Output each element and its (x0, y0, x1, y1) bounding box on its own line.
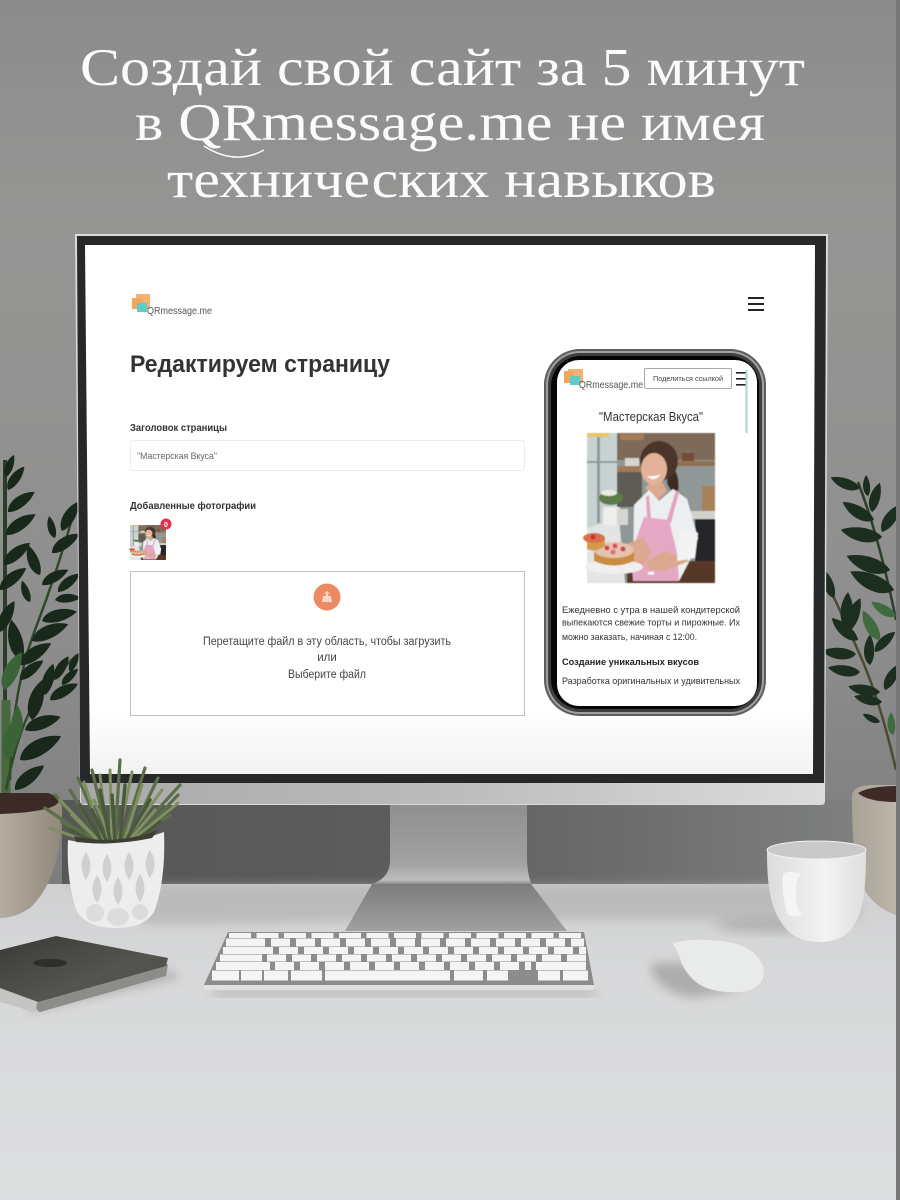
phone paragraph: можно заказать, начиная с 12:00. (562, 632, 697, 643)
white faceted pot (68, 830, 164, 928)
icon: phone hamburger menu (736, 372, 746, 386)
dropzone text: Перетащите файл в эту область, чтобы загрузить (203, 636, 451, 648)
dropzone text: Выберите файл (288, 669, 366, 681)
phone paragraph (562, 605, 740, 643)
notebook (0, 936, 180, 1012)
key rows (212, 936, 588, 976)
logo: QRmessage.me (132, 294, 212, 317)
dropzone panel (130, 572, 524, 716)
dropzone text: или (317, 652, 337, 664)
monitor black bezel (77, 236, 826, 783)
icon: hamburger menu (748, 297, 764, 311)
title: технических навыков (167, 151, 716, 209)
input: page title: "Мастерская Вкуса" (137, 451, 217, 461)
desk surface (0, 884, 900, 1200)
stand neck (372, 804, 532, 884)
heading: edit page: Редактируем страницу (130, 351, 391, 378)
logo: QRmessage.me: QRmessage.me (147, 305, 212, 317)
label: page title: Заголовок страницы (130, 422, 227, 434)
share button (644, 368, 732, 388)
wall shadow below monitor (62, 800, 852, 886)
phone paragraph: Ежедневно с утра в нашей кондитерской (562, 605, 740, 616)
input: page title (130, 440, 524, 470)
succulent blades (45, 760, 180, 842)
phone logo (564, 369, 643, 391)
pot: right beige pot (852, 785, 896, 915)
title: Создай свой сайт за 5 минут (80, 39, 805, 97)
monitor stand (345, 804, 567, 931)
dropzone text (203, 636, 451, 681)
phone paragraph: выпекаются свежие торты и пирожные. Их (562, 618, 740, 628)
mug handle (783, 872, 803, 916)
phone page title: "Мастерская Вкуса" (599, 410, 703, 424)
phone logo: QRmessage.me (579, 379, 643, 391)
white mug (715, 841, 866, 942)
title (80, 39, 805, 209)
monitor silver frame and chin (75, 234, 828, 805)
phone mockup (544, 349, 766, 716)
small plant in white pot (45, 760, 180, 928)
keyboard (204, 932, 600, 996)
plant: right zamioculcas (820, 473, 900, 770)
wall background (0, 0, 900, 890)
plant: left zamioculcas (0, 453, 83, 800)
icon: upload (314, 584, 340, 610)
label: added photos: Добавленные фотографии (130, 500, 256, 512)
title: в QRmessage.me не имея (135, 94, 765, 152)
monitor (75, 234, 828, 805)
thumbnail photo with badge (129, 518, 172, 560)
photo: baker with cake (583, 433, 715, 583)
monitor screen (85, 245, 815, 774)
scrollbar (746, 370, 748, 433)
thumbnail photo with badge: 0 (164, 522, 168, 529)
stand foot (345, 884, 567, 931)
phone body (544, 349, 766, 716)
pot: left beige pot (0, 793, 62, 918)
phone subheading: Создание уникальных вкусов (562, 657, 699, 668)
phone body text: Разработка оригинальных и удивительных (562, 676, 740, 687)
computer mouse (650, 939, 764, 998)
right edge strip (896, 0, 900, 1200)
share button: Поделиться ссылкой (653, 374, 723, 383)
